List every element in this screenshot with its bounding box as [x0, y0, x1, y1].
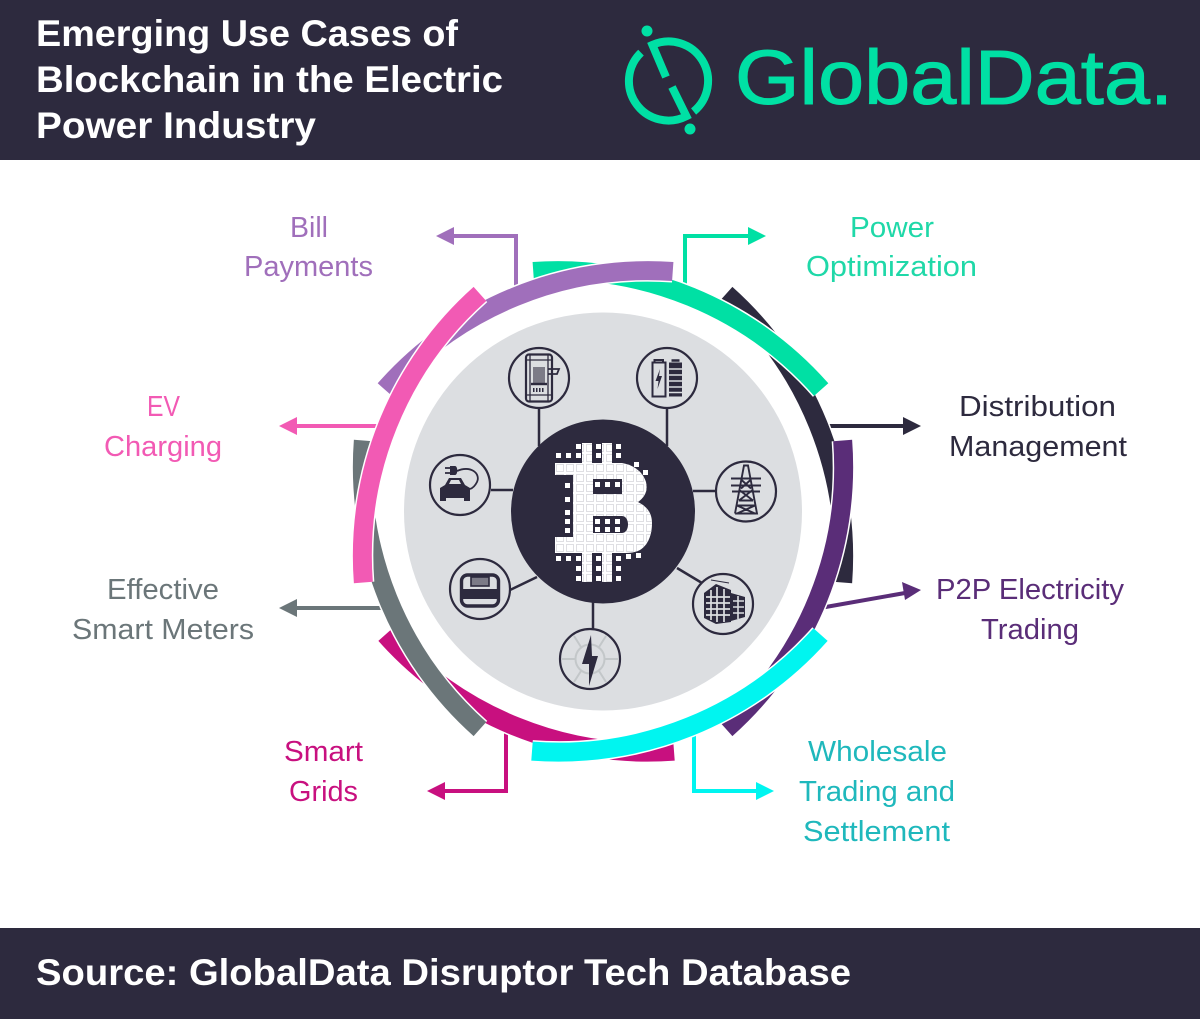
label: Effective Smart Meters	[72, 574, 254, 646]
title: Emerging Use Cases of	[36, 13, 459, 54]
arrow: P2P electricity trading	[820, 582, 921, 608]
connector lines from hub to icons	[491, 408, 717, 630]
icon: smart grid bolt	[560, 629, 620, 689]
arrow: bill payments	[436, 227, 516, 290]
ring band: bill payments	[371, 238, 673, 390]
arrow: smart grids	[427, 730, 506, 800]
label: Bill Payments: Bill	[290, 212, 328, 244]
ring band: P2P electricity trading	[726, 441, 876, 743]
label: Effective Smart Meters: Effective	[107, 574, 219, 606]
label: P2P Electricity Trading: Trading	[981, 614, 1079, 646]
label: Distribution Management: Management	[949, 431, 1127, 463]
label: Distribution Management: Distribution	[959, 391, 1116, 423]
logo wordmark: GlobalData.	[735, 35, 1173, 121]
ring band: distribution management	[726, 280, 876, 582]
central dark hub	[511, 420, 695, 604]
label: Smart Grids: Smart	[284, 736, 363, 768]
icon: office building	[693, 574, 753, 634]
icon: EV charging car	[430, 455, 490, 515]
ring band: smart grids	[372, 635, 674, 785]
icon: pixel bitcoin symbol	[555, 443, 652, 582]
label: P2P Electricity Trading	[936, 574, 1125, 646]
label: EV Charging: Charging	[104, 431, 222, 463]
ring band: EV charging	[330, 280, 480, 582]
arrow: EV charging	[279, 417, 382, 435]
header band	[0, 0, 1200, 160]
arrow: distribution management	[825, 417, 921, 435]
ring band: effective smart meters	[330, 441, 480, 743]
icon: GlobalData logo mark	[629, 26, 708, 134]
label: Power Optimization: Power	[850, 212, 934, 244]
label: Wholesale Trading and Settlement: Trading and	[799, 776, 955, 808]
icon: payment terminal	[509, 348, 569, 408]
label: P2P Electricity Trading: P2P Electricity	[936, 574, 1125, 606]
title	[36, 13, 503, 146]
label: Power Optimization	[806, 212, 977, 283]
label: Distribution Management	[949, 391, 1127, 463]
title: Blockchain in the Electric	[36, 59, 503, 100]
label: Wholesale Trading and Settlement: Wholesale	[808, 736, 947, 768]
arrow: effective smart meters	[279, 599, 388, 617]
label: Wholesale Trading and Settlement: Settlement	[803, 816, 950, 848]
arrow: wholesale trading	[694, 732, 774, 800]
label: Smart Grids: Grids	[289, 776, 358, 808]
label: Wholesale Trading and Settlement	[799, 736, 955, 848]
arrow: power optimization	[685, 227, 766, 288]
title: Power Industry	[36, 105, 316, 146]
source text: Source: GlobalData Disruptor Tech Database	[36, 952, 851, 993]
ring band: wholesale trading	[532, 635, 834, 785]
label: Power Optimization: Optimization	[806, 251, 977, 283]
footer band	[0, 928, 1200, 1019]
label: Bill Payments: Payments	[244, 251, 373, 283]
icon: transmission tower	[716, 462, 776, 522]
icon: batteries	[637, 348, 697, 408]
label: Smart Grids	[284, 736, 363, 808]
label: Bill Payments	[244, 212, 373, 283]
gray central disc	[404, 312, 802, 710]
label: Effective Smart Meters: Smart Meters	[72, 614, 254, 646]
label: EV Charging: EV	[147, 391, 181, 423]
label: EV Charging	[104, 391, 222, 463]
icon: smart meter	[450, 559, 510, 619]
ring band: power optimization	[533, 238, 835, 390]
